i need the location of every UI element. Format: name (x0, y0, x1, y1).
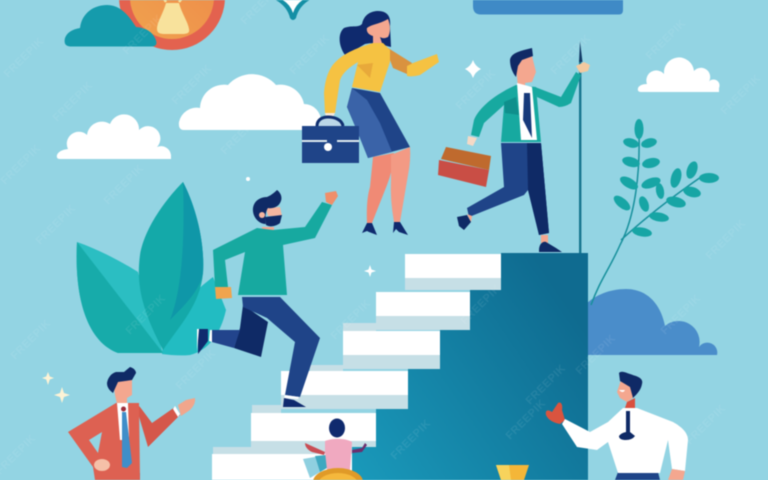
watermarks: FREEPIK (574, 332, 618, 377)
white cloud right (638, 57, 720, 92)
man in red jacket (68, 367, 195, 480)
medal with money bag (119, 0, 225, 50)
staircase (212, 254, 501, 480)
large leaf plant (77, 182, 226, 355)
star badge top (272, 0, 313, 20)
watermarks: FREEPIK (288, 32, 332, 77)
watermarks: FREEPIK (524, 362, 568, 407)
watermarks: FREEPIK (704, 217, 748, 262)
tower (352, 253, 588, 480)
white cloud large (179, 74, 321, 130)
watermarks: FREEPIK (459, 282, 503, 327)
flag pole (579, 41, 582, 253)
watermarks: FREEPIK (174, 347, 218, 392)
blue cloud top (473, 0, 623, 14)
watermarks: FREEPIK (51, 79, 95, 124)
small branch plant (591, 119, 719, 305)
trophy (496, 465, 529, 480)
man with pole and red case (438, 48, 590, 252)
watermarks: FREEPIK (219, 112, 263, 157)
watermarks: FREEPIK (9, 317, 53, 362)
watermarks: FREEPIK (121, 12, 165, 57)
watermarks: FREEPIK (102, 162, 146, 207)
running man (197, 190, 338, 407)
watermarks: FREEPIK (719, 72, 763, 117)
watermarks: FREEPIK (659, 292, 703, 337)
man in white shirt (546, 372, 688, 480)
sparkles (42, 60, 481, 403)
woman with briefcase (302, 11, 439, 235)
watermarks: FREEPIK (389, 417, 433, 462)
watermarks: FREEPIK (170, 62, 214, 107)
teal cloud (65, 5, 156, 46)
watermarks: FREEPIK (329, 297, 373, 342)
watermarks: FREEPIK (124, 292, 168, 337)
watermarks: FREEPIK (504, 397, 548, 442)
blue cloud lower (585, 289, 717, 355)
watermarks: FREEPIK (644, 17, 688, 62)
watermarks: FREEPIK (34, 202, 78, 247)
white cloud left (57, 114, 171, 159)
watermarks: FREEPIK (2, 35, 46, 80)
watermarks: FREEPIK (549, 32, 593, 77)
watermarks: FREEPIK (684, 402, 728, 447)
child with coin (303, 418, 367, 480)
watermarks: FREEPIK (454, 67, 498, 112)
